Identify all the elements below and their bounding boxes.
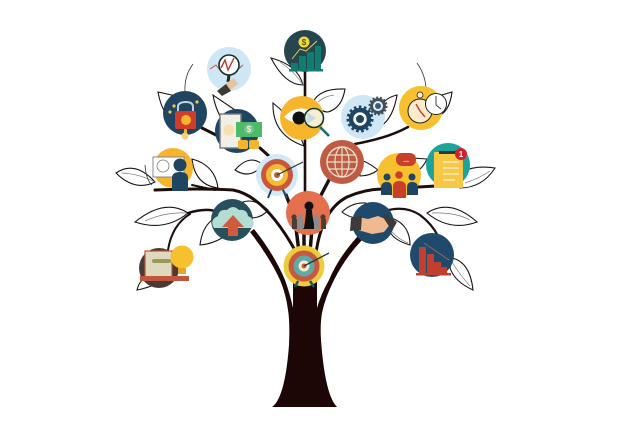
icon: orange circle with chess figures — [286, 191, 330, 235]
icon: rising chart with dollar coin: $ — [302, 38, 307, 47]
icon: rising chart with dollar coin — [284, 30, 326, 72]
icon: group of people with speech bubble: ... — [403, 157, 409, 164]
icon: globe — [320, 140, 364, 184]
icon: group of people with speech bubble — [377, 153, 421, 198]
icon: checklist with notification — [426, 143, 470, 188]
icon: padlock — [163, 91, 207, 140]
icon: laptop and light bulb — [139, 246, 194, 288]
icon: tablet with money: $ — [247, 125, 252, 134]
trunk — [250, 229, 362, 407]
icon: falling bar chart — [410, 233, 454, 277]
icon: gears — [341, 95, 386, 139]
icon: large central target — [284, 246, 329, 287]
branches — [155, 60, 438, 253]
icon: checklist with notification: 1 — [459, 150, 464, 159]
icon: magnifier with chart — [207, 47, 251, 96]
icon: stopwatch and clock — [399, 86, 446, 130]
icon: eye and magnifier — [280, 96, 329, 140]
icon: presenter at board — [153, 148, 193, 191]
icon: small target — [256, 154, 303, 198]
icon: handshake — [350, 202, 397, 244]
leaves — [116, 58, 495, 290]
icon: cloud upload — [211, 199, 254, 241]
icon: tablet with money — [215, 109, 262, 153]
